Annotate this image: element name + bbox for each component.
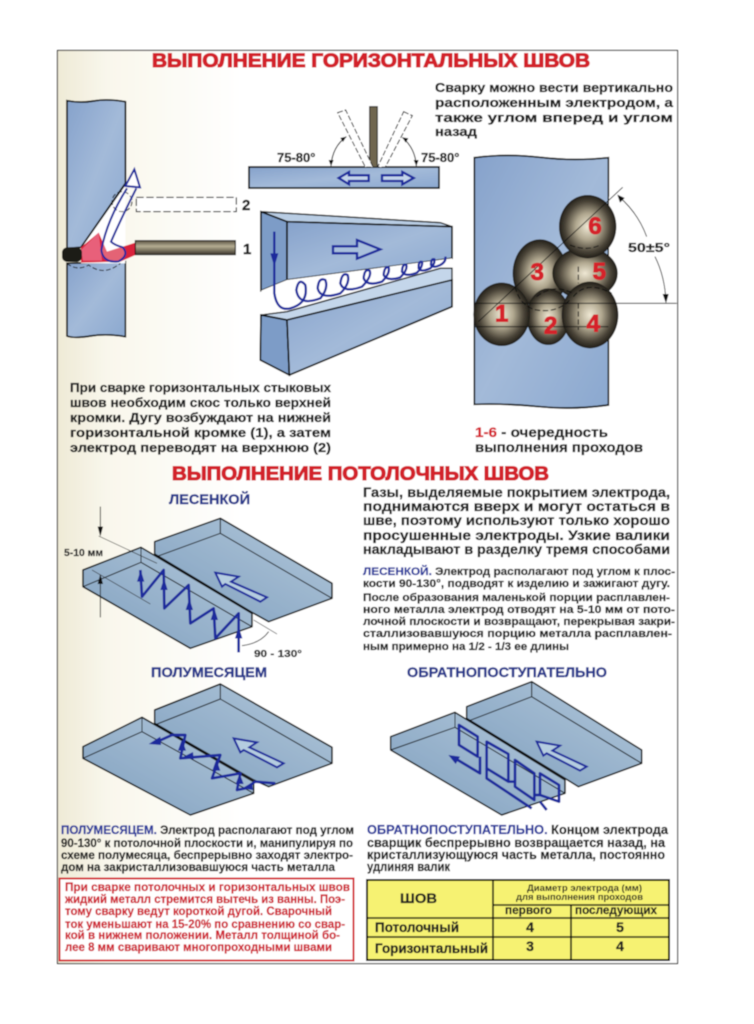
table: electrode diameter: 3 [526, 938, 534, 954]
diagram: crescent method [83, 684, 332, 815]
table: electrode diameter: первого [505, 903, 552, 917]
text block: electrode position: расположенным электродом, а [435, 95, 674, 110]
text block: ladder method: лочной плоскости и возвращают, перекрывая закри- [363, 616, 675, 628]
text block: horizontal butt welds: швов необходим скос только верхней [70, 395, 331, 410]
text block: crescent method: дом на закристаллизовавшуюся часть металла [61, 860, 335, 874]
table: electrode diameter: для выполнения проходов [516, 892, 643, 902]
direction arrow [215, 573, 267, 602]
weld pool [81, 233, 135, 263]
diagram: reciprocating method [391, 682, 642, 815]
text block: horizontal butt welds: горизонтальной кромке (1), а затем [70, 425, 331, 440]
caption: pass order [475, 425, 643, 455]
pass numbers: 1 [495, 301, 508, 328]
table: electrode diameter: последующих [575, 903, 657, 917]
text block: electrode position: назад [435, 124, 478, 139]
callout: short arc warning: ток уменьшают на 15-20% по сравнению со свар- [65, 917, 345, 931]
text block: horizontal butt welds [70, 380, 332, 455]
heading: reciprocating: ОБРАТНОПОСТУПАТЕЛЬНО [407, 664, 607, 680]
title: overhead seams: ВЫПОЛНЕНИЕ ПОТОЛОЧНЫХ ШВОВ [172, 464, 549, 485]
pass numbers: 4 [587, 311, 601, 338]
labels: ladder dimensions: 90 - 130° [254, 649, 302, 660]
text block: ladder method: кости 90-130°, подводят к изделию и зажигают дугу. [363, 578, 670, 590]
label: bevel angle: 50±5° [628, 240, 670, 255]
labels: angle values: 75-80° [277, 150, 315, 165]
zigzag path [140, 570, 239, 652]
dashed overlap lines [515, 245, 612, 330]
text block: gases: поднимаются вверх и могут остаться в [363, 498, 670, 514]
table: electrode diameter: 4 [526, 919, 534, 935]
electrode spiral [274, 232, 445, 309]
labels: electrode positions [242, 197, 251, 258]
text block: electrode position: также углом вперед и углом [435, 110, 673, 125]
text block: gases: Газы, выделяемые покрытием электрода, [363, 484, 670, 500]
pass numbers: 3 [531, 259, 544, 286]
heading: ladder: ЛЕСЕНКОЙ [169, 490, 250, 507]
text block: ladder method: ным примерно на 1/2 - 1/3 ее длины [363, 641, 569, 653]
electrode position 1 [135, 241, 235, 255]
text block: crescent method: ПОЛУМЕСЯЦЕМ. Электрод располагают под углом [61, 823, 354, 837]
text block: crescent method: схеме полумесяца, беспрерывно заходят электро- [61, 848, 353, 862]
diagram: horizontal joint cross-section [62, 100, 236, 337]
electrode position 2 [136, 197, 236, 212]
table: electrode diameter: 5 [616, 919, 624, 935]
callout: short arc warning: жидкий металл стремится вытечь из ванны. Поэ- [64, 892, 345, 906]
caption: pass order: 1-6 - очередность [475, 425, 608, 440]
text block: horizontal butt welds: кромки. Дугу возбуждают на нижней [70, 410, 331, 425]
text block: ladder method: После образования маленькой порции расплавлен- [363, 592, 670, 604]
diagram: wedge plates with electrode spiral [260, 212, 452, 375]
text block: electrode position: Сварку можно вести вертикально [435, 80, 673, 95]
diagram: multi-pass weld sequence [473, 155, 677, 408]
text block: gases: шве, поэтому используют только хорошо [363, 512, 670, 528]
dimension arrows [99, 507, 102, 617]
labels: electrode positions: 2 [242, 197, 250, 214]
text block: gases: просушенные электроды. Узкие валики [363, 527, 670, 543]
direction arrows [339, 172, 414, 184]
text block: horizontal butt welds: электрод переводят на верхнюю (2) [70, 440, 331, 455]
callout: short arc warning [60, 878, 354, 960]
pass numbers: 2 [544, 312, 557, 339]
callout: short arc warning: При сварке потолочных и горизонтальных швов [65, 880, 350, 894]
page frame [58, 50, 678, 964]
text block: crescent method [61, 823, 354, 874]
pass numbers: 5 [593, 258, 606, 285]
callout: short arc warning: тому сварку ведут короткой дугой. Сварочный [65, 904, 332, 918]
title: horizontal seams: ВЫПОЛНЕНИЕ ГОРИЗОНТАЛЬНЫХ ШВОВ [152, 51, 590, 72]
text block: reciprocating method: сварщик беспрерывно возвращается назад, на [367, 836, 666, 850]
diagram: ladder method [83, 507, 332, 652]
reference lines [474, 187, 677, 327]
labels: angle values: 75-80° [421, 150, 459, 165]
weld passes [513, 239, 567, 307]
text block: ladder method [363, 565, 675, 653]
text block: ladder method: ЛЕСЕНКОЙ. Электрод располагают под углом к плос- [363, 565, 675, 578]
pass numbers: 6 [588, 213, 602, 240]
labels: electrode positions: 1 [243, 241, 251, 258]
diagram: electrode angles [249, 107, 439, 188]
text block: ladder method: ного металла электрод отводят на 5-10 мм от пото- [363, 604, 675, 616]
table: electrode diameter: ШОВ [400, 890, 437, 906]
text block: reciprocating method: удлиняя валик [367, 860, 451, 874]
table: electrode diameter [367, 880, 669, 960]
labels: ladder dimensions: 5-10 мм [64, 548, 103, 559]
text block: gases: накладывают в разделку тремя способами [363, 541, 670, 557]
labels: angle values [277, 150, 459, 165]
text block: reciprocating method: ОБРАТНОПОСТУПАТЕЛЬНО. Концом электрода [367, 823, 669, 837]
callout: short arc warning: кой в нижнем положении. Металл толщиной бо- [65, 928, 340, 942]
text block: electrode position [435, 80, 674, 139]
labels: ladder dimensions [64, 548, 302, 660]
pass numbers [495, 213, 606, 339]
caption: pass order: выполнения проходов [475, 440, 643, 455]
dashed weld outlines [67, 192, 132, 270]
table: electrode diameter: Потолочный [375, 919, 459, 935]
table: electrode diameter: 4 [616, 938, 624, 954]
text block: reciprocating method [367, 823, 669, 874]
callout: short arc warning: лее 8 мм сваривают многопроходными швами [65, 940, 332, 954]
text block: ladder method: сталлизовавшуюся порцию металла расплавлен- [363, 628, 672, 640]
text block: crescent method: 90-130° к потолочной плоскости и, манипулируя по [61, 836, 353, 850]
heading: crescent: ПОЛУМЕСЯЦЕМ [151, 664, 267, 680]
text block: reciprocating method: кристаллизующуюся часть металла, постоянно [367, 848, 665, 862]
table: electrode diameter: Горизонтальный [375, 940, 488, 956]
text block: gases [363, 484, 670, 557]
table: electrode diameter: Диаметр электрода (мм) [527, 883, 642, 893]
text block: horizontal butt welds: При сварке горизонтальных стыковых [70, 380, 332, 395]
electrode path arrow [101, 188, 136, 262]
